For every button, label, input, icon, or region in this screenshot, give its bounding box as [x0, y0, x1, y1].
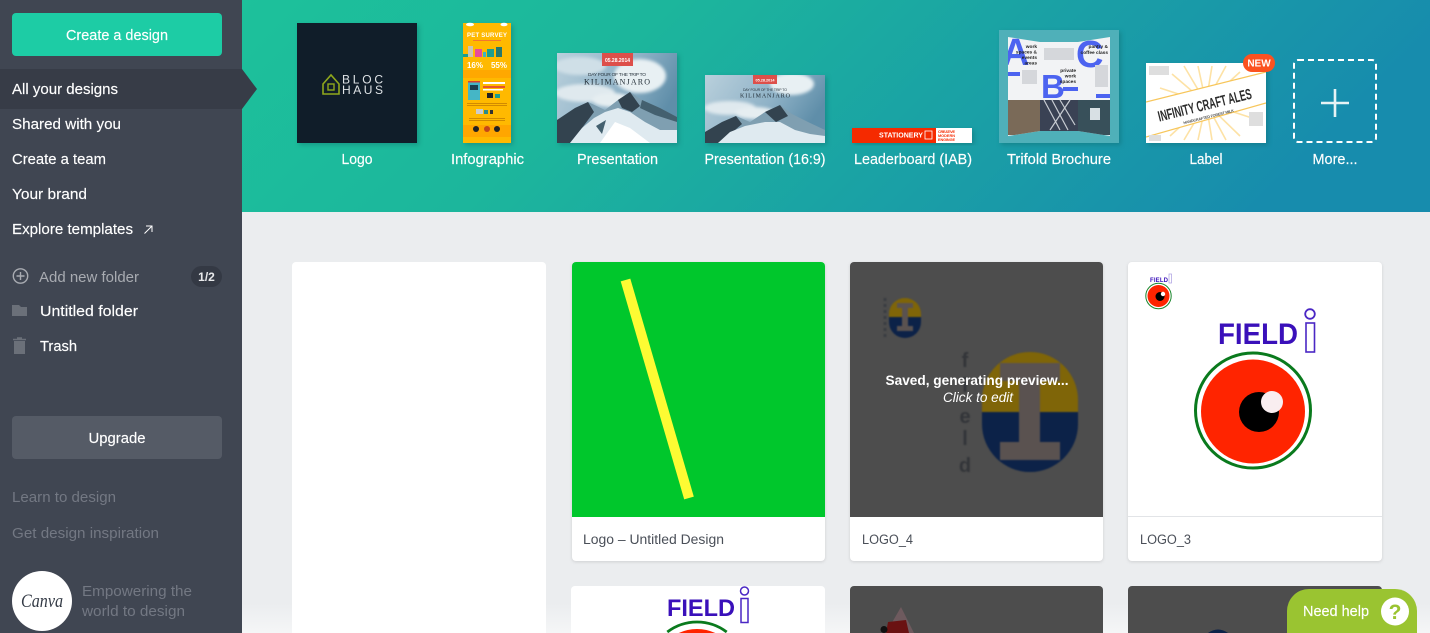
mini field logo: FIELD — [1150, 278, 1169, 284]
add new folder row: 1/2 — [198, 270, 215, 284]
tile: Leaderboard: CREATIVE — [938, 130, 955, 134]
tile: Trifold Brochure: events — [1022, 55, 1037, 61]
card: LOGO_4 generating preview: LOGO_4 — [862, 532, 913, 547]
tile: Presentation: Presentation — [577, 152, 658, 168]
tile: Trifold Brochure: areas — [1024, 60, 1037, 66]
tile: Leaderboard: STATIONERY — [879, 130, 923, 140]
tile: Presentation: 05.28.2014 — [605, 58, 630, 64]
nav item: Shared with you: Shared with you — [12, 116, 121, 133]
tile: More: More... — [1312, 152, 1358, 168]
tile: Trifold Brochure: C — [1076, 34, 1103, 76]
page background — [242, 212, 1430, 633]
card: LOGO_3: LOGO_3 — [1140, 532, 1191, 547]
card: second row FIELD logo — [571, 586, 825, 633]
tile: Leaderboard: ENGINGE — [938, 138, 955, 142]
tile: Infographic: 55% — [491, 61, 507, 70]
tile: Trifold Brochure: work — [1064, 74, 1076, 80]
tile: Leaderboard: MODERN — [938, 134, 955, 138]
folder: Untitled folder: Untitled folder — [40, 303, 138, 320]
card: blank design — [292, 262, 546, 633]
tile: Label — [1146, 54, 1275, 168]
add new folder row: Add new folder — [39, 269, 139, 286]
tile: Logo: Logo — [342, 152, 372, 168]
folder: Trash: Trash — [40, 338, 77, 355]
add new folder row — [13, 266, 222, 287]
link: Get design inspiration: Get design inspiration — [12, 525, 159, 542]
tile: Presentation 16:9 — [704, 73, 826, 168]
tile: Label: Label — [1190, 152, 1222, 168]
tile: Leaderboard — [852, 128, 972, 168]
mini field logo — [1146, 274, 1172, 309]
button: Need help — [1287, 589, 1417, 633]
blurred logo preview — [885, 298, 1078, 477]
tile: Presentation: KILIMANJARO — [584, 78, 650, 86]
tile: Presentation — [554, 53, 677, 168]
tile: Infographic — [451, 23, 524, 168]
tile: Label: HANDCRAFTED FOREST MILK — [1183, 109, 1235, 125]
card: second row preview 2 — [1128, 586, 1382, 633]
nav item: All your designs (active): All your designs — [12, 81, 118, 98]
tile: Logo — [297, 23, 417, 168]
yellow line — [626, 280, 689, 498]
tile: Infographic: 16% — [467, 61, 483, 70]
status text — [886, 372, 1068, 405]
blurred logo preview: i — [962, 375, 968, 397]
card: Logo – Untitled Design — [572, 262, 825, 561]
tile: Trifold Brochure: B — [1041, 68, 1065, 105]
tile: Trifold Brochure: spaces & — [1016, 50, 1038, 56]
card: LOGO_4 generating preview — [850, 262, 1103, 561]
tile: Infographic: PET SURVEY — [467, 33, 507, 39]
brand: Canva logo — [12, 571, 72, 631]
card: second row FIELD logo: FIELD — [667, 595, 735, 622]
tile: Presentation 16:9: 05.28.2014 — [755, 78, 775, 82]
tile: Label: INFINITY CRAFT ALES — [1156, 86, 1254, 125]
blurred logo preview: e — [959, 406, 971, 428]
blurred logo preview: d — [959, 455, 971, 477]
button: Upgrade: Upgrade — [88, 430, 146, 447]
tile: Trifold Brochure: private — [1060, 68, 1076, 74]
tile: Logo: HAUS — [342, 83, 383, 97]
tile: Trifold Brochure: pantry & — [1089, 44, 1109, 50]
tile: Presentation 16:9: Presentation (16:9) — [704, 152, 826, 168]
tile: Presentation 16:9: DAY FOUR OF THE TRIP TO — [743, 88, 787, 92]
tile: Presentation 16:9: KILIMANJARO — [740, 94, 791, 100]
tagline: Empowering the — [82, 583, 192, 600]
tagline — [81, 583, 192, 620]
tile: Trifold Brochure: Trifold Brochure — [1007, 152, 1111, 168]
button: Need help: Need help — [1303, 603, 1369, 620]
brand: Canva logo: Canva — [21, 591, 63, 612]
button: Create a design — [12, 13, 222, 56]
tagline: world to design — [81, 603, 185, 620]
tile: Trifold Brochure: work — [1025, 44, 1037, 50]
tile: Leaderboard: Leaderboard (IAB) — [854, 152, 972, 168]
field logo — [1196, 309, 1315, 468]
header banner: design types — [242, 0, 1430, 212]
nav item: Your brand: Your brand — [12, 186, 87, 203]
button: Create a design: Create a design — [66, 27, 168, 44]
card: Logo – Untitled Design: Logo – Untitled Design — [583, 532, 724, 547]
blurred logo preview: l — [962, 428, 968, 450]
nav item: All your designs (active) — [0, 69, 257, 109]
tile: Infographic: Infographic — [451, 152, 524, 168]
folder: Trash — [13, 338, 77, 355]
card: second row preview 1 — [850, 586, 1103, 633]
blurred logo preview: f — [962, 350, 969, 372]
icon: question mark: ? — [1389, 601, 1401, 624]
tile: Trifold Brochure: coffee class — [1081, 50, 1108, 56]
sidebar — [0, 0, 257, 633]
tile: More — [1294, 60, 1376, 168]
nav item: Create a team: Create a team — [12, 151, 106, 168]
tile: Presentation: DAY FOUR OF THE TRIP TO — [588, 72, 646, 78]
field logo: FIELD — [1218, 318, 1298, 351]
tile: Trifold Brochure — [999, 30, 1119, 168]
badge: NEW: NEW — [1247, 58, 1271, 70]
tile: Trifold Brochure: spaces — [1060, 80, 1076, 85]
nav item: Explore templates: Explore templates — [12, 221, 133, 238]
tile: Logo: BLOC — [342, 72, 383, 86]
button: Upgrade — [12, 416, 222, 459]
tile: Trifold Brochure: A — [1002, 32, 1029, 74]
card: LOGO_3 — [1128, 262, 1382, 561]
status text: Click to edit — [943, 390, 1014, 405]
status text: Saved, generating preview... — [886, 372, 1068, 388]
link: Learn to design: Learn to design — [12, 489, 116, 506]
